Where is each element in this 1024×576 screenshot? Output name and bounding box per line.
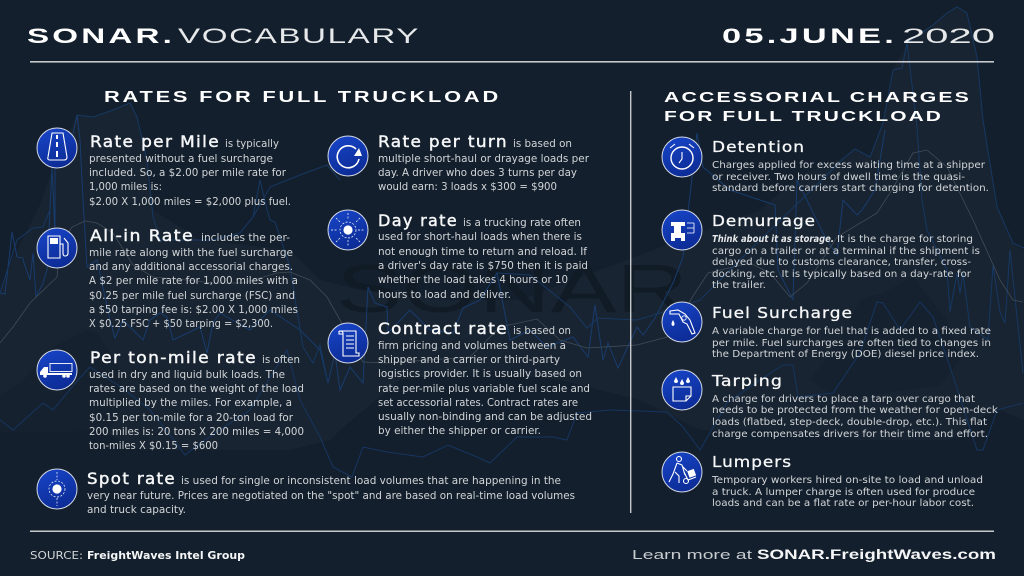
panel: Rate per turn bbox=[328, 132, 590, 193]
definition text bbox=[378, 217, 588, 301]
definition text: firm pricing and volumes between a bbox=[378, 340, 566, 352]
definition text bbox=[712, 160, 989, 194]
date bbox=[722, 25, 995, 48]
term: Detention: Detention bbox=[712, 138, 805, 156]
definition text: and truck capacity. bbox=[87, 504, 186, 516]
definition text: would earn: 3 loads x $300 = $900 bbox=[378, 181, 557, 193]
panel: Demurrage bbox=[662, 210, 980, 291]
definition text: hours to load and deliver. bbox=[378, 289, 511, 301]
definition text bbox=[89, 354, 304, 452]
definition text bbox=[89, 232, 298, 330]
definition text: A variable charge for fuel that is added to a fixed rate bbox=[712, 326, 991, 337]
term: Lumpers: Lumpers bbox=[712, 453, 792, 471]
definition text: shipper and a carrier or third-party bbox=[378, 354, 560, 366]
term: Rate per turn: Rate per turn bbox=[378, 132, 508, 151]
panel: Per ton-mile rate bbox=[37, 348, 304, 452]
title bbox=[27, 25, 420, 48]
icon: tarp and rain bbox=[662, 370, 702, 410]
definition text: a $50 tarping fee is: $2.00 X 1,000 miles bbox=[89, 304, 298, 316]
term: Fuel Surcharge: Fuel Surcharge bbox=[712, 304, 853, 322]
panel: Rate per Mile bbox=[37, 128, 291, 208]
definition text: X $0.25 FSC + $50 tarping = $2,300. bbox=[89, 318, 273, 330]
definition text: loads and can be a flat rate or per-hour labor cost. bbox=[712, 498, 974, 509]
background: blue line mid ridge bbox=[253, 165, 340, 217]
panel: Contract rate bbox=[328, 319, 592, 437]
learn more link bbox=[632, 547, 996, 562]
icon: spot target bbox=[37, 469, 77, 509]
panel: Day rate bbox=[328, 210, 588, 301]
definition text: per mile. Fuel surcharges are often tied to changes in bbox=[712, 338, 991, 349]
definition text: multiple short-haul or drayage loads per bbox=[378, 153, 590, 165]
term: Rate per Mile: Rate per Mile bbox=[90, 132, 220, 151]
panel: All-in Rate bbox=[37, 226, 298, 330]
definition text: $0.15 per ton-mile for a 20-ton load for bbox=[89, 412, 294, 424]
definition text: whether the load takes 4 hours or 10 bbox=[378, 274, 568, 286]
background: blue line ridge left bbox=[0, 167, 52, 293]
definition text: the trailer. bbox=[712, 280, 766, 291]
definition text: 1,000 miles is: bbox=[89, 181, 162, 193]
definition text: Charges applied for excess waiting time at a shipper bbox=[712, 160, 986, 171]
term: All-in Rate: All-in Rate bbox=[90, 226, 194, 245]
background: grey trend line bbox=[0, 150, 1023, 363]
term: Spot rate: Spot rate bbox=[87, 469, 176, 488]
icon: truck bbox=[37, 350, 77, 390]
source: FreightWaves Intel Group bbox=[87, 549, 245, 562]
definition text: $0.25 per mile fuel surcharge (FSC) and bbox=[89, 290, 295, 302]
definition text bbox=[378, 325, 592, 437]
definition text: rates are based on the weight of the load bbox=[89, 383, 304, 395]
icon: rotate arrow bbox=[328, 136, 368, 176]
definition text: a driver's day rate is $750 then it is paid bbox=[378, 260, 588, 272]
definition text: is based on bbox=[513, 138, 572, 150]
definition text bbox=[711, 475, 983, 509]
icon: fuel nozzle bbox=[662, 302, 702, 342]
panel: Fuel Surcharge bbox=[662, 302, 991, 360]
definition text: the Department of Energy (DOE) diesel price index. bbox=[712, 349, 979, 360]
definition text bbox=[712, 394, 998, 440]
definition text bbox=[89, 138, 291, 208]
definition text: rate per-mile plus variable fuel scale and bbox=[378, 383, 590, 395]
icon: fuel pump bbox=[37, 228, 77, 268]
panel: Spot rate bbox=[37, 469, 575, 516]
definition text bbox=[378, 138, 590, 193]
icon: truck front bbox=[662, 210, 702, 250]
definition text: and any additional accessorial charges. bbox=[89, 261, 293, 273]
icon: road bbox=[37, 128, 77, 168]
panel: Detention bbox=[662, 137, 989, 194]
background: blue spiky line left bbox=[0, 115, 885, 390]
source: SOURCE: bbox=[30, 549, 83, 562]
heading: accessorial charges: FOR FULL TRUCKLOAD bbox=[664, 108, 943, 125]
term: Per ton-mile rate: Per ton-mile rate bbox=[90, 348, 257, 367]
definition text: loads (flatbed, step-deck, double-drop, etc.). This flat bbox=[712, 417, 987, 428]
definition text: A charge for drivers to place a tarp over cargo that bbox=[712, 394, 975, 405]
definition text: by either the shipper or carrier. bbox=[378, 425, 541, 437]
definition text: very near future. Prices are negotiated on the "spot" and are based on real-time load volumes bbox=[87, 490, 575, 502]
term: Contract rate: Contract rate bbox=[378, 319, 508, 338]
definition text: usually non-binding and can be adjusted bbox=[378, 411, 592, 423]
definition text: $2.00 X 1,000 miles = $2,000 plus fuel. bbox=[89, 196, 291, 208]
date: 05.JUNE. bbox=[722, 25, 897, 48]
definition text: includes the per- bbox=[201, 232, 290, 244]
icon: sun bbox=[328, 210, 368, 250]
definition text bbox=[87, 475, 575, 516]
definition text bbox=[712, 234, 980, 291]
definition text: charge compensates drivers for their time and effort. bbox=[712, 429, 988, 440]
definition text: day. A driver who does 3 turns per day bbox=[378, 167, 577, 179]
background: SONAR watermark: SONAR bbox=[336, 251, 688, 327]
learn more link: SONAR.FreightWaves.com bbox=[757, 547, 996, 562]
definition text: Temporary workers hired on-site to load and unload bbox=[711, 475, 983, 486]
background: blue smooth line bottom bbox=[0, 302, 1023, 477]
definition text: mile rate along with the fuel surcharge bbox=[89, 247, 293, 259]
learn more link: Learn more at bbox=[632, 547, 753, 562]
definition text: a truck. A lumper charge is often used for produce bbox=[712, 487, 975, 498]
background: blue mountain line bbox=[77, 103, 328, 383]
definition text: is a trucking rate often bbox=[463, 217, 581, 229]
definition text: is typically bbox=[225, 138, 279, 150]
heading: accessorial charges: ACCESSORIAL CHARGES bbox=[664, 89, 971, 106]
definition text: cargo on a trailer or at a terminal if the shipment is bbox=[712, 246, 980, 257]
term: Demurrage: Demurrage bbox=[712, 212, 816, 230]
background: blue line right peaks bbox=[497, 43, 1023, 373]
heading: rates for full truckload: RATES FOR FULL TRUCKLOAD bbox=[104, 89, 501, 106]
definition text: delayed due to customs clearance, transfer, cross- bbox=[712, 257, 971, 268]
definition text: A $2 per mile rate for 1,000 miles with a bbox=[89, 275, 298, 287]
panel: Lumpers bbox=[662, 452, 983, 509]
title: SONAR. bbox=[27, 25, 175, 48]
date: 2020 bbox=[902, 25, 995, 48]
definition text: needs to be protected from the weather for open-deck bbox=[712, 405, 998, 416]
definition text: multiplied by the miles. For example, a bbox=[89, 397, 292, 409]
definition text: or receiver. Two hours of dwell time is the quasi- bbox=[712, 172, 965, 183]
term: Tarping: Tarping bbox=[711, 372, 783, 390]
definition text: is based on bbox=[513, 325, 571, 337]
background: blue line far right bbox=[907, 7, 1024, 248]
panel: Tarping bbox=[662, 370, 998, 440]
definition text: ton-miles X $0.15 = $600 bbox=[89, 440, 218, 452]
definition text: 200 miles is: 20 tons X 200 miles = 4,000 bbox=[89, 426, 304, 438]
icon: alarm clock bbox=[662, 137, 702, 177]
definition text: presented without a fuel surcharge bbox=[89, 153, 273, 165]
heading: accessorial charges bbox=[664, 89, 971, 125]
definition text: Think about it as storage. bbox=[712, 234, 834, 245]
definition text: is used for single or inconsistent load volumes that are happening in the bbox=[181, 475, 561, 487]
background: mountain silhouette bbox=[0, 7, 1024, 450]
definition text: set accessorial rates. Contract rates are bbox=[378, 397, 578, 409]
definition text: included. So, a $2.00 per mile rate for bbox=[89, 167, 287, 179]
definition text: logistics provider. It is usually based on bbox=[378, 368, 582, 380]
definition text: not enough time to return and reload. If bbox=[378, 246, 587, 258]
icon: scroll bbox=[328, 323, 368, 363]
definition text: standard before carriers start charging for detention. bbox=[712, 183, 989, 194]
definition text: used in dry and liquid bulk loads. The bbox=[89, 369, 285, 381]
definition text: It is the charge for storing bbox=[837, 234, 973, 245]
definition text: is often bbox=[262, 354, 300, 366]
title: VOCABULARY bbox=[178, 25, 420, 48]
definition text bbox=[712, 326, 991, 360]
definition text: used for short-haul loads when there is bbox=[378, 231, 582, 243]
term: Day rate: Day rate bbox=[378, 211, 458, 230]
definition text: docking, etc. It is typically based on a day-rate for bbox=[712, 269, 972, 280]
icon: worker with hand truck bbox=[662, 452, 702, 492]
